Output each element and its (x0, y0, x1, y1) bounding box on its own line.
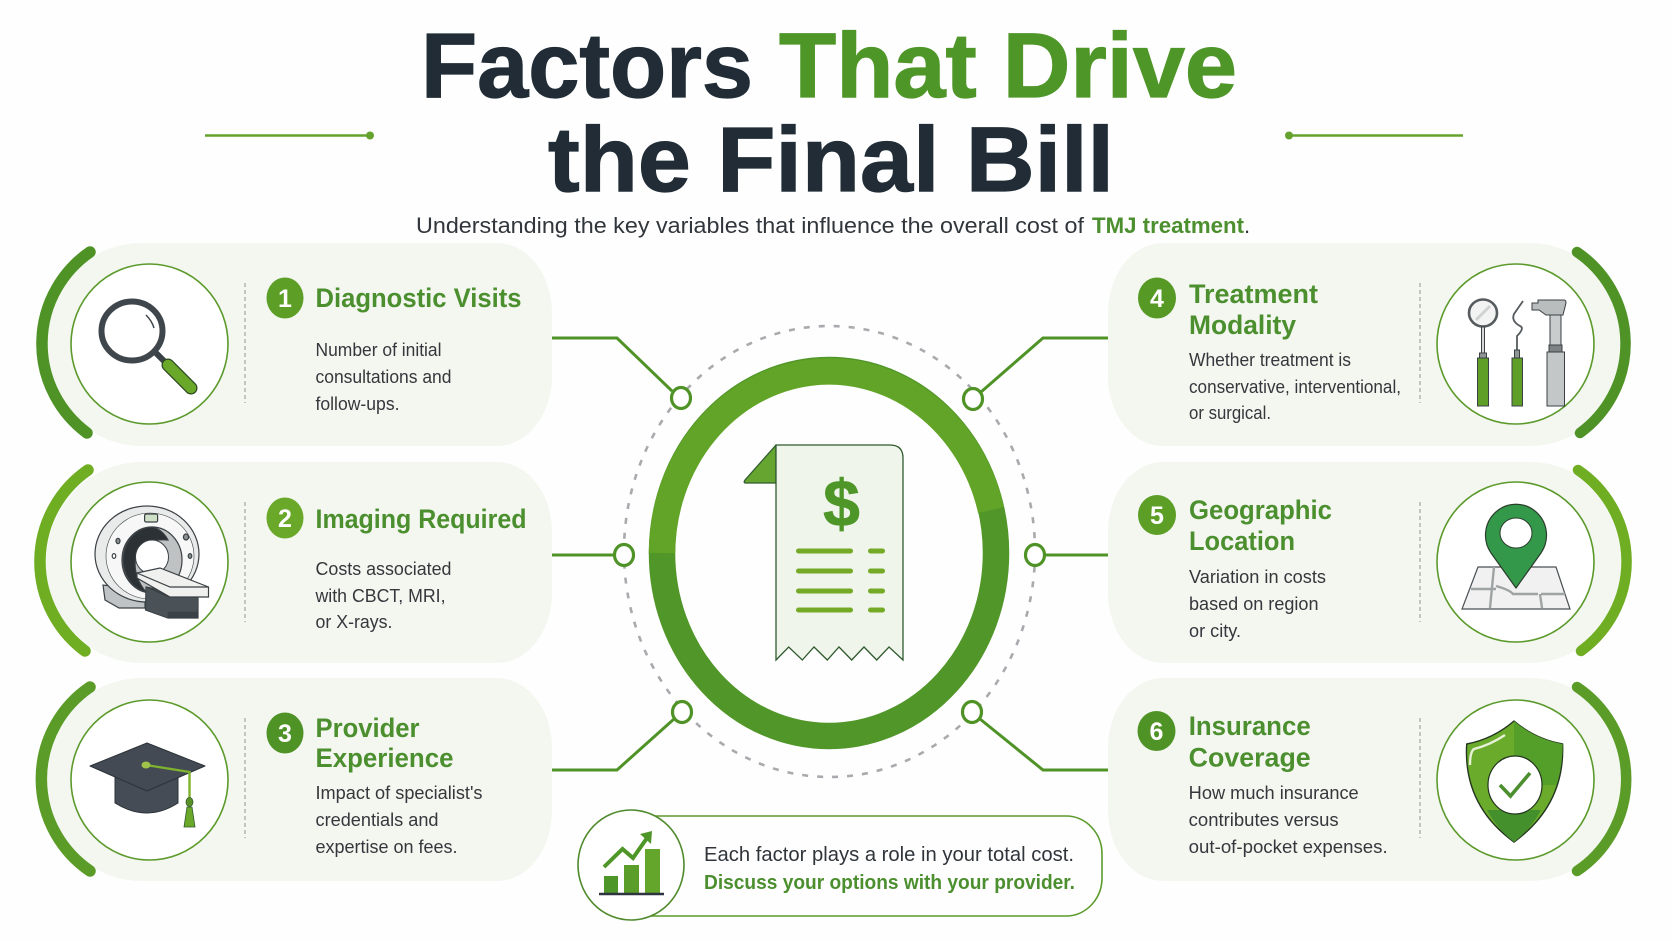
heading (316, 713, 454, 773)
description: consultations and (316, 367, 452, 387)
title: That Drive (779, 15, 1237, 117)
heading (1189, 711, 1311, 772)
heading: Location (1189, 526, 1295, 556)
central ring (662, 370, 996, 736)
connector lines (552, 338, 1108, 770)
description (316, 783, 482, 857)
heading: Insurance (1189, 711, 1311, 741)
description: credentials and (316, 810, 438, 830)
icon: receipt (744, 445, 903, 660)
description: or surgical. (1189, 403, 1271, 423)
callout text: Each factor plays a role in your total cost. (704, 843, 1074, 866)
subtitle: . (1244, 213, 1250, 238)
description: Costs associated (316, 559, 452, 579)
badge 4 (1138, 278, 1176, 318)
subtitle: Understanding the key variables that influence the overall cost of (416, 213, 1085, 238)
panel: 5 Geographic Location (1108, 462, 1627, 663)
description (316, 340, 452, 414)
icon: shield (1466, 721, 1563, 842)
dollar sign: $ (823, 466, 860, 540)
description: out-of-pocket expenses. (1189, 837, 1388, 857)
description (1189, 567, 1326, 641)
right title rule (1285, 132, 1463, 140)
icon: map pin (1462, 504, 1570, 609)
panel: 1 Diagnostic Visits (42, 243, 552, 446)
title: Factors (421, 15, 753, 117)
badge 3: 3 (278, 720, 292, 748)
description (1189, 350, 1401, 423)
description: How much insurance (1189, 783, 1359, 803)
badge 4: 4 (1150, 285, 1164, 313)
heading (1189, 495, 1332, 556)
panel: 3 Provider Experience (41, 678, 552, 881)
description: conservative, interventional, (1189, 377, 1401, 397)
icon: bar chart with arrow (599, 831, 664, 894)
badge 5: 5 (1150, 502, 1164, 530)
badge 6: 6 (1150, 718, 1163, 746)
receipt lines (796, 548, 885, 612)
description: Number of initial (316, 340, 442, 360)
description (315, 559, 452, 632)
heading (1189, 279, 1318, 340)
description: Variation in costs (1189, 567, 1326, 587)
icon: graduation cap (90, 743, 205, 827)
panel: 6 Insurance Coverage (1108, 678, 1626, 881)
heading: Provider (316, 713, 420, 743)
description: Impact of specialist's (316, 783, 482, 803)
panel: 2 Imaging Required (40, 462, 552, 663)
badge 5 (1138, 495, 1176, 535)
heading: Geographic (1189, 495, 1332, 525)
description: expertise on fees. (316, 837, 458, 857)
badge 3 (266, 712, 304, 754)
heading: Coverage (1189, 742, 1311, 772)
dashed orbit (624, 326, 1035, 777)
icon: dental tools (1469, 300, 1566, 406)
badge 6 (1138, 711, 1176, 751)
description: based on region (1189, 594, 1318, 614)
badge 2: 2 (278, 505, 292, 533)
heading: Modality (1189, 310, 1296, 340)
badge 2 (266, 498, 304, 538)
callout (578, 810, 1102, 920)
description: contributes versus (1189, 810, 1339, 830)
description (1189, 783, 1388, 857)
heading: Imaging Required (316, 504, 526, 534)
description: or city. (1189, 621, 1241, 641)
description: with CBCT, MRI, (315, 586, 446, 606)
panel: 4 Treatment Modality (1108, 243, 1626, 446)
icon: CT scanner (95, 506, 208, 618)
heading: Treatment (1189, 279, 1318, 309)
badge 1: 1 (278, 285, 292, 313)
callout text (704, 843, 1075, 894)
title: the Final Bill (548, 109, 1114, 211)
title (421, 15, 1237, 211)
subtitle: TMJ treatment (1092, 213, 1245, 238)
callout text: Discuss your options with your provider. (704, 871, 1075, 894)
badge 1 (266, 278, 304, 318)
heading: Diagnostic Visits (316, 283, 522, 313)
description: follow-ups. (316, 394, 400, 414)
description: Whether treatment is (1189, 350, 1351, 370)
description: or X-rays. (316, 612, 392, 632)
icon: magnifying glass (102, 302, 191, 388)
left title rule (205, 132, 374, 140)
connector nodes (614, 388, 1044, 722)
heading: Experience (316, 743, 454, 773)
